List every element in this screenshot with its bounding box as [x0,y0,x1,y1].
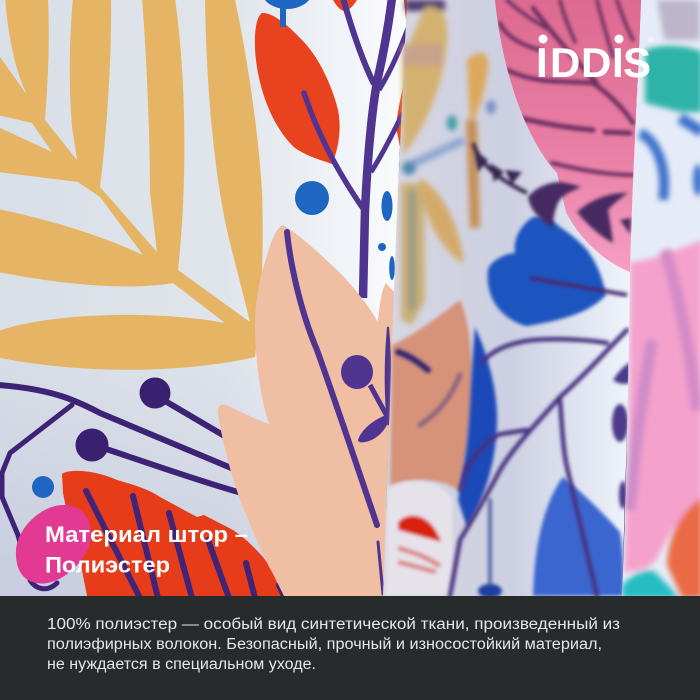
teal bottom [622,571,680,598]
blurred purple marks on peach leaf [398,352,460,425]
pink leaf [490,0,645,275]
blurred peach leaf [390,300,472,490]
logo: IDDIS: ® [648,36,654,44]
teal sliver [387,433,390,510]
red leaf bottom [62,471,283,596]
blue blob [488,217,606,326]
peach leaf [218,225,400,596]
lower-left branches [0,385,245,589]
blue arcs [640,133,664,200]
branch circles [76,378,170,462]
blurred yellow leaves [401,0,496,325]
panel: right blurred curtain fold [620,0,700,600]
yellow palm leaves [0,0,263,370]
heading: material [45,522,248,578]
callout: pink blob [16,505,91,583]
teal shape [645,46,700,112]
small red accents [332,0,409,147]
purple veins on red leaf [86,491,285,598]
dark purple sprig [473,143,631,243]
pink leaf [624,240,700,572]
blue leaf in middle [458,327,497,527]
logo: IDDIS: IDDIS [536,39,651,86]
orange striped leaf [667,498,700,598]
panel: left curtain fold [0,0,410,600]
purple branches top [304,0,408,298]
purple branches [450,330,627,596]
description text [47,616,620,673]
panel: bottom description bar [0,596,700,700]
blurred red and white flower [386,481,453,596]
red leaf top [255,13,340,164]
blurred blue bud [478,584,502,598]
purple details on peach leaf [287,232,390,594]
blue leaf bottom [533,477,624,596]
top lavender pattern [657,0,700,40]
heading: material: Материал штор – [45,522,248,547]
blue flower top [265,0,309,27]
description text: не нуждается в специальном уходе. [47,656,316,673]
blue dots [32,181,395,498]
panel: middle blurred curtain fold [383,0,645,598]
description text: 100% полиэстер — особый вид синтетической ткани, произведенный из [47,616,620,633]
heading: material: Полиэстер [45,552,170,578]
purple dots near fold [612,362,630,509]
description text: полиэфирных волокон. Безопасный, прочный и износостойкий материал, [47,636,602,653]
blue blob vein [530,278,627,295]
